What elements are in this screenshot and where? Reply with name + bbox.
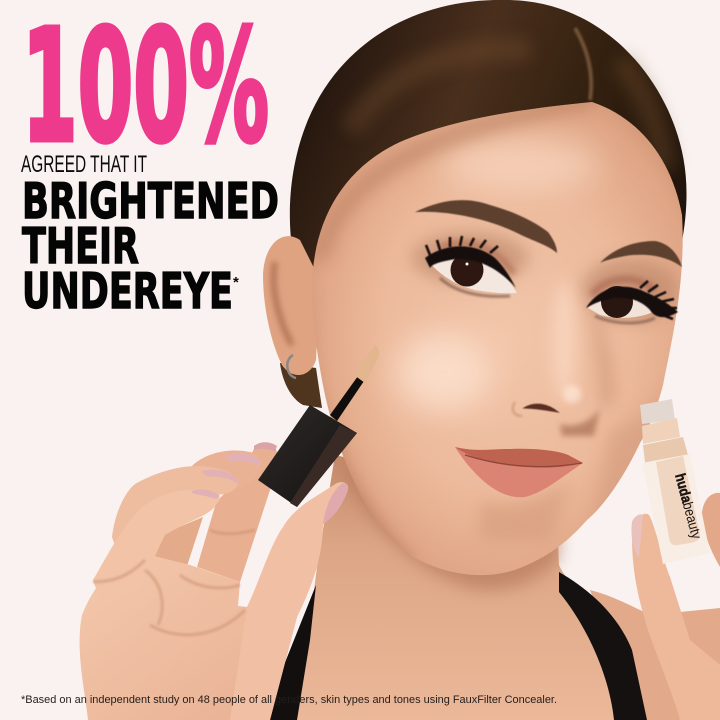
cheek highlight xyxy=(395,332,491,412)
right cheek shade xyxy=(598,401,658,510)
nostril xyxy=(524,404,558,412)
earring xyxy=(287,355,296,378)
finger: pointer xyxy=(112,466,238,560)
eye socket shading left xyxy=(412,232,528,284)
hair bun near ear xyxy=(280,363,322,408)
forehead highlight xyxy=(440,139,600,191)
finger: behind cap xyxy=(197,444,277,582)
neck and chest xyxy=(297,455,650,720)
hair xyxy=(290,0,687,300)
left eye xyxy=(425,236,517,296)
shadow below nose xyxy=(560,408,600,436)
right eyebrow xyxy=(600,241,682,267)
concealer applicator xyxy=(258,345,379,507)
portrait: woman holding concealer xyxy=(262,0,720,720)
wand xyxy=(330,376,364,421)
headline stat: 100%: 100% xyxy=(22,0,269,177)
finger: front xyxy=(93,490,220,600)
right eye lashes xyxy=(586,281,678,319)
neck xyxy=(642,418,680,444)
line three: UNDEREYE xyxy=(22,263,233,320)
hair highlights xyxy=(350,49,665,170)
hairline shadow xyxy=(320,100,592,260)
line one: BRIGHTENED xyxy=(22,173,279,230)
black top: right strap xyxy=(559,572,647,720)
thumb xyxy=(230,482,348,720)
subheading: AGREED THAT IT xyxy=(21,151,147,178)
right hand xyxy=(631,493,720,720)
concealer tube xyxy=(640,399,710,564)
finger: back xyxy=(190,451,262,490)
lips xyxy=(455,447,583,497)
hair parting xyxy=(575,28,591,100)
inner ear shade xyxy=(274,262,292,345)
black top: left strap xyxy=(262,585,316,720)
nail: back finger xyxy=(226,453,261,466)
ear xyxy=(263,236,320,375)
cap xyxy=(258,405,357,507)
web between fingers xyxy=(150,517,203,566)
face xyxy=(312,102,683,575)
face shading, clipped to the face xyxy=(300,100,678,565)
brand name: hudabeauty xyxy=(671,472,704,541)
nail: finger behind cap xyxy=(254,442,277,452)
nail: thumb xyxy=(323,483,348,524)
nose wing xyxy=(513,402,522,416)
clear cap xyxy=(640,399,675,424)
left eye lashes xyxy=(425,236,516,288)
nail: pointer xyxy=(201,470,239,483)
nose tip highlight xyxy=(563,385,581,403)
nail xyxy=(631,514,643,558)
left side contour xyxy=(323,386,416,558)
asterisk: * xyxy=(233,274,239,291)
palm creases xyxy=(93,530,255,635)
bottle xyxy=(642,454,710,564)
holding finger xyxy=(632,514,720,720)
product inside bottle xyxy=(656,456,700,545)
neck shadow under jaw xyxy=(340,462,560,590)
right shoulder xyxy=(590,590,720,720)
collar xyxy=(643,437,688,463)
palm xyxy=(80,555,297,720)
nose highlight xyxy=(552,280,576,400)
left eye lid colour xyxy=(440,244,514,274)
right eye xyxy=(586,279,678,323)
applicator tip xyxy=(354,345,379,383)
eye socket shading right xyxy=(582,258,678,322)
back finger xyxy=(702,493,720,567)
cap side face xyxy=(290,425,357,507)
nail: front finger xyxy=(192,489,220,499)
left eyebrow xyxy=(415,200,557,253)
main claim xyxy=(22,173,279,320)
chin shadow xyxy=(480,489,564,540)
footnote: *Based on an independent study on 48 people of all genders, skin types and tones using FauxFilter Concealer. xyxy=(21,694,557,706)
line two: THEIR xyxy=(22,218,139,275)
left hand xyxy=(80,442,348,720)
right eye lid colour xyxy=(592,279,655,295)
shadow right of nose xyxy=(590,320,618,406)
